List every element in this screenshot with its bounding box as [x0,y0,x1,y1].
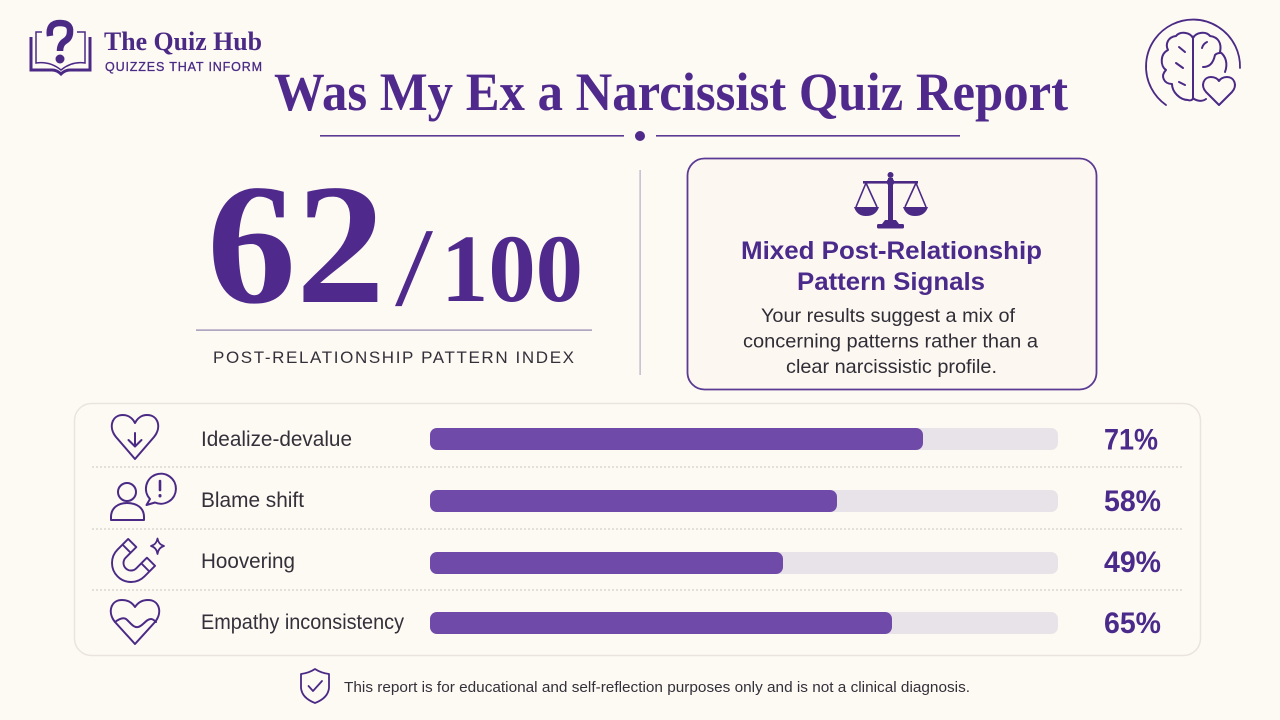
bar: 58% [430,490,1058,512]
summary body text: Your results suggest a mix of [761,305,1016,327]
value: 71% [1104,424,1158,456]
logo tagline: QUIZZES THAT INFORM [105,60,262,74]
icon: magnet with sparkle [104,538,164,590]
label: Idealize-devalue [201,428,352,451]
score slash: / [395,206,434,330]
icon: brain with heart [1146,20,1240,105]
label: Hoovering [201,550,295,573]
summary heading [741,237,1042,296]
summary heading: Pattern Signals [797,268,985,296]
summary body text: concerning patterns rather than a [743,330,1038,352]
panel: result summary [688,158,1096,390]
logo name: The Quiz Hub [104,27,262,56]
disclaimer [301,669,970,703]
icon: shield with check [301,669,329,703]
value: 49% [1104,546,1161,579]
row: Empathy inconsistency [111,600,1161,644]
title divider [320,131,960,141]
icon: balance scale [854,172,928,228]
score: 62/100 [207,150,583,340]
value: 58% [1104,485,1161,518]
summary body text: clear narcissistic profile. [786,356,997,378]
score denominator: 100 [441,215,583,322]
icon: open book with question mark [31,23,90,74]
score caption: POST-RELATIONSHIP PATTERN INDEX [213,348,574,367]
icon: heart with wave [111,600,159,644]
title: Was My Ex a Narcissist Quiz Report [274,62,1068,122]
summary body text [743,305,1038,378]
summary heading: Mixed Post-Relationship [741,237,1042,265]
vertical divider [640,170,641,375]
score value: 62 [207,150,385,340]
row: Hoovering [104,538,1161,590]
icon: person with speech bubble [111,474,176,520]
row: Blame shift [111,474,1161,520]
bar: 65% [430,612,1058,634]
score rule [196,330,592,331]
bar: 71% [430,428,1058,450]
disclaimer text: This report is for educational and self-reflection purposes only and is not a clinical diagnosis. [344,679,970,696]
label: Empathy inconsistency [201,611,404,634]
label: Blame shift [201,489,304,512]
panel: pattern scores [74,404,1200,656]
bar: 49% [430,552,1058,574]
logo: The Quiz Hub [31,23,262,74]
row: Idealize-devalue [112,415,1158,459]
icon: heart with down arrow [112,415,158,459]
value: 65% [1104,607,1161,640]
